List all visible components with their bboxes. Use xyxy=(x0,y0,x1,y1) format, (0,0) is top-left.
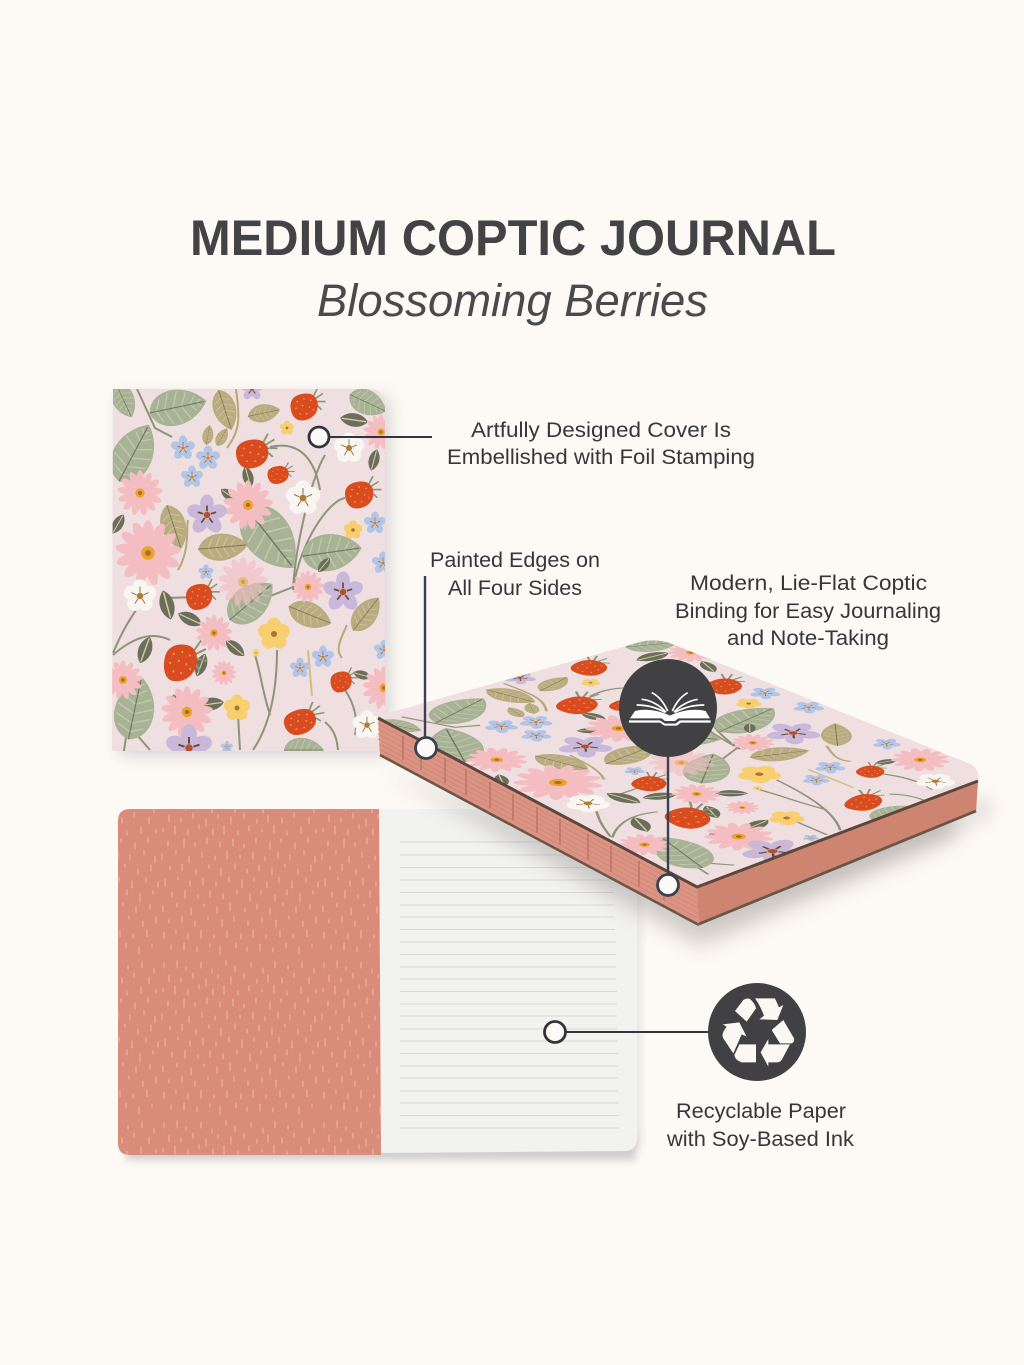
subtitle: Blossoming Berries xyxy=(317,275,708,326)
callout: recyclable paper: Recyclable Paper xyxy=(676,1100,846,1123)
journal front cover xyxy=(112,389,396,762)
coptic-bound journal angled view xyxy=(377,640,994,952)
callout: lie-flat binding xyxy=(619,572,941,896)
callout: lie-flat binding: Modern, Lie-Flat Coptic xyxy=(690,572,927,595)
angled floral cover xyxy=(384,640,978,883)
painted fore edge xyxy=(697,781,978,925)
title: MEDIUM COPTIC JOURNAL xyxy=(190,210,836,266)
open journal spread xyxy=(118,809,642,1160)
callout: recyclable paper: with Soy-Based Ink xyxy=(666,1128,855,1151)
callout: painted edges: All Four Sides xyxy=(448,577,582,600)
patterned inside cover xyxy=(118,809,381,1155)
icon: open book xyxy=(619,659,717,757)
callout: foil stamped cover xyxy=(309,419,755,469)
icon: recycling arrows xyxy=(708,983,806,1081)
callout: foil stamped cover: Artfully Designed Cover Is xyxy=(471,419,731,442)
ruled inner page xyxy=(379,809,637,1153)
callout: lie-flat binding: and Note-Taking xyxy=(727,627,889,650)
painted spine edge with exposed stitching xyxy=(378,718,699,925)
callout: lie-flat binding: Binding for Easy Journaling xyxy=(675,600,941,623)
callout: painted edges: Painted Edges on xyxy=(430,549,600,572)
callout: painted edges xyxy=(416,549,600,758)
callout: foil stamped cover: Embellished with Foil Stamping xyxy=(447,446,755,469)
callout: recyclable paper xyxy=(544,983,855,1151)
